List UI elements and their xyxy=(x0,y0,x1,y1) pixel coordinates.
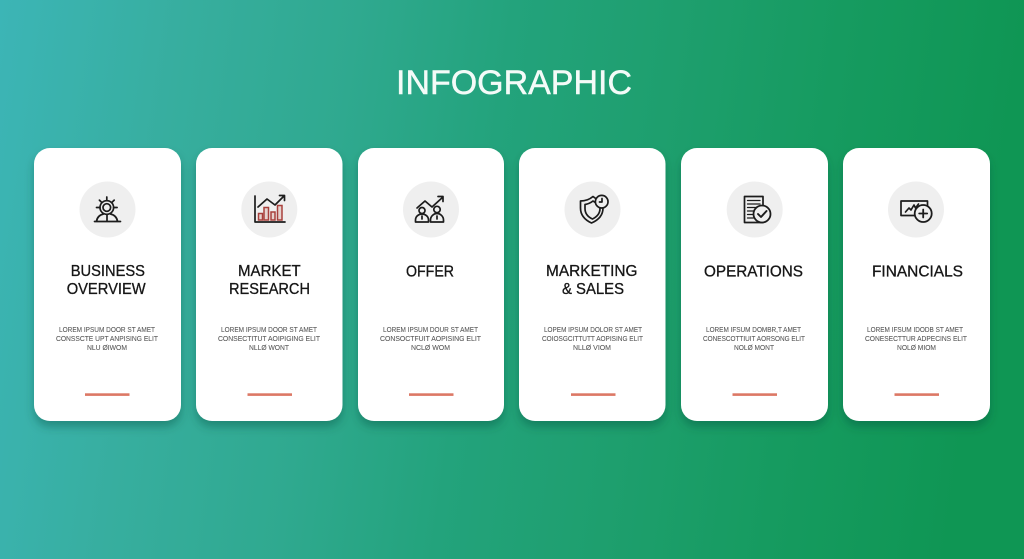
panel: business overview xyxy=(34,148,181,421)
body text: CONESECTTUR ADPECINS ELIT xyxy=(865,334,967,343)
body text: NOLØ MIOM xyxy=(897,343,936,352)
panel: operations xyxy=(681,148,828,421)
body text: LOREM IFSUM IDODB ST AMET xyxy=(867,325,963,334)
body text xyxy=(703,325,805,352)
title: INFOGRAPHIC xyxy=(396,64,632,102)
card background xyxy=(681,148,828,421)
accent line xyxy=(732,393,777,396)
heading: MARKETING xyxy=(546,263,638,280)
body text xyxy=(542,325,643,352)
body text: NLU ØIWOM xyxy=(87,343,127,352)
accent line xyxy=(571,393,616,396)
heading xyxy=(229,263,310,298)
body text xyxy=(865,325,967,352)
body text: NLLØ VIOM xyxy=(573,343,611,352)
body text: LOREM IPSUM DOUR ST AMET xyxy=(383,325,478,334)
heading: BUSINESS xyxy=(71,263,145,280)
panel: marketing and sales xyxy=(519,148,666,421)
card background xyxy=(196,148,342,421)
heading: OPERATIONS xyxy=(704,264,803,280)
body text: LOREM IPSUM DOOR ST AMET xyxy=(221,325,317,334)
heading: FINANCIALS xyxy=(872,264,963,280)
accent line xyxy=(894,393,939,396)
body text: LOREM IPSUM DOOR ST AMET xyxy=(59,325,155,334)
heading: RESEARCH xyxy=(229,281,310,298)
accent line xyxy=(248,393,292,396)
heading xyxy=(546,263,638,298)
body text xyxy=(218,325,320,352)
panel: financials xyxy=(843,148,990,421)
body text: CONSECTITUT AOIPIGING ELIT xyxy=(218,334,320,343)
heading: OVERVIEW xyxy=(67,281,146,298)
card background xyxy=(519,148,666,421)
heading: & SALES xyxy=(562,281,624,298)
card background xyxy=(34,148,181,421)
body text: LOREM IFSUM DOMBR,T AMET xyxy=(706,325,801,334)
icon: two people with rising arrow xyxy=(403,182,459,238)
body text: CONSOCTFUIT AOPISING ELIT xyxy=(380,334,481,343)
body text xyxy=(380,325,481,352)
icon: shield with clock xyxy=(564,182,620,238)
card background xyxy=(843,148,990,421)
accent line xyxy=(409,393,454,396)
heading: OFFER xyxy=(406,264,454,280)
panel: offer xyxy=(358,148,504,421)
body text: COIOSGCITTUTT AOPISING ELIT xyxy=(542,334,643,343)
body text: CONESCOTTIUIT AORSONG ELIT xyxy=(703,334,805,343)
body text: LOPEM IPSUM DOLOR ST AMET xyxy=(544,325,642,334)
body text: NLLØ WONT xyxy=(249,343,289,352)
icon: document with check xyxy=(727,182,783,238)
heading: MARKET xyxy=(238,263,301,280)
icon: bar chart with arrow xyxy=(241,182,297,238)
body text: NOLØ MONT xyxy=(734,343,774,352)
heading xyxy=(67,263,146,298)
card background xyxy=(358,148,504,421)
body text xyxy=(56,325,158,352)
body text: NCLØ WOM xyxy=(411,343,450,352)
panel: market research xyxy=(196,148,342,421)
icon: gear and person xyxy=(80,182,136,238)
body text: CONSSCTE UPT ANPISING ELIT xyxy=(56,334,158,343)
accent line xyxy=(85,393,130,396)
icon: chart board with plus xyxy=(888,182,944,238)
